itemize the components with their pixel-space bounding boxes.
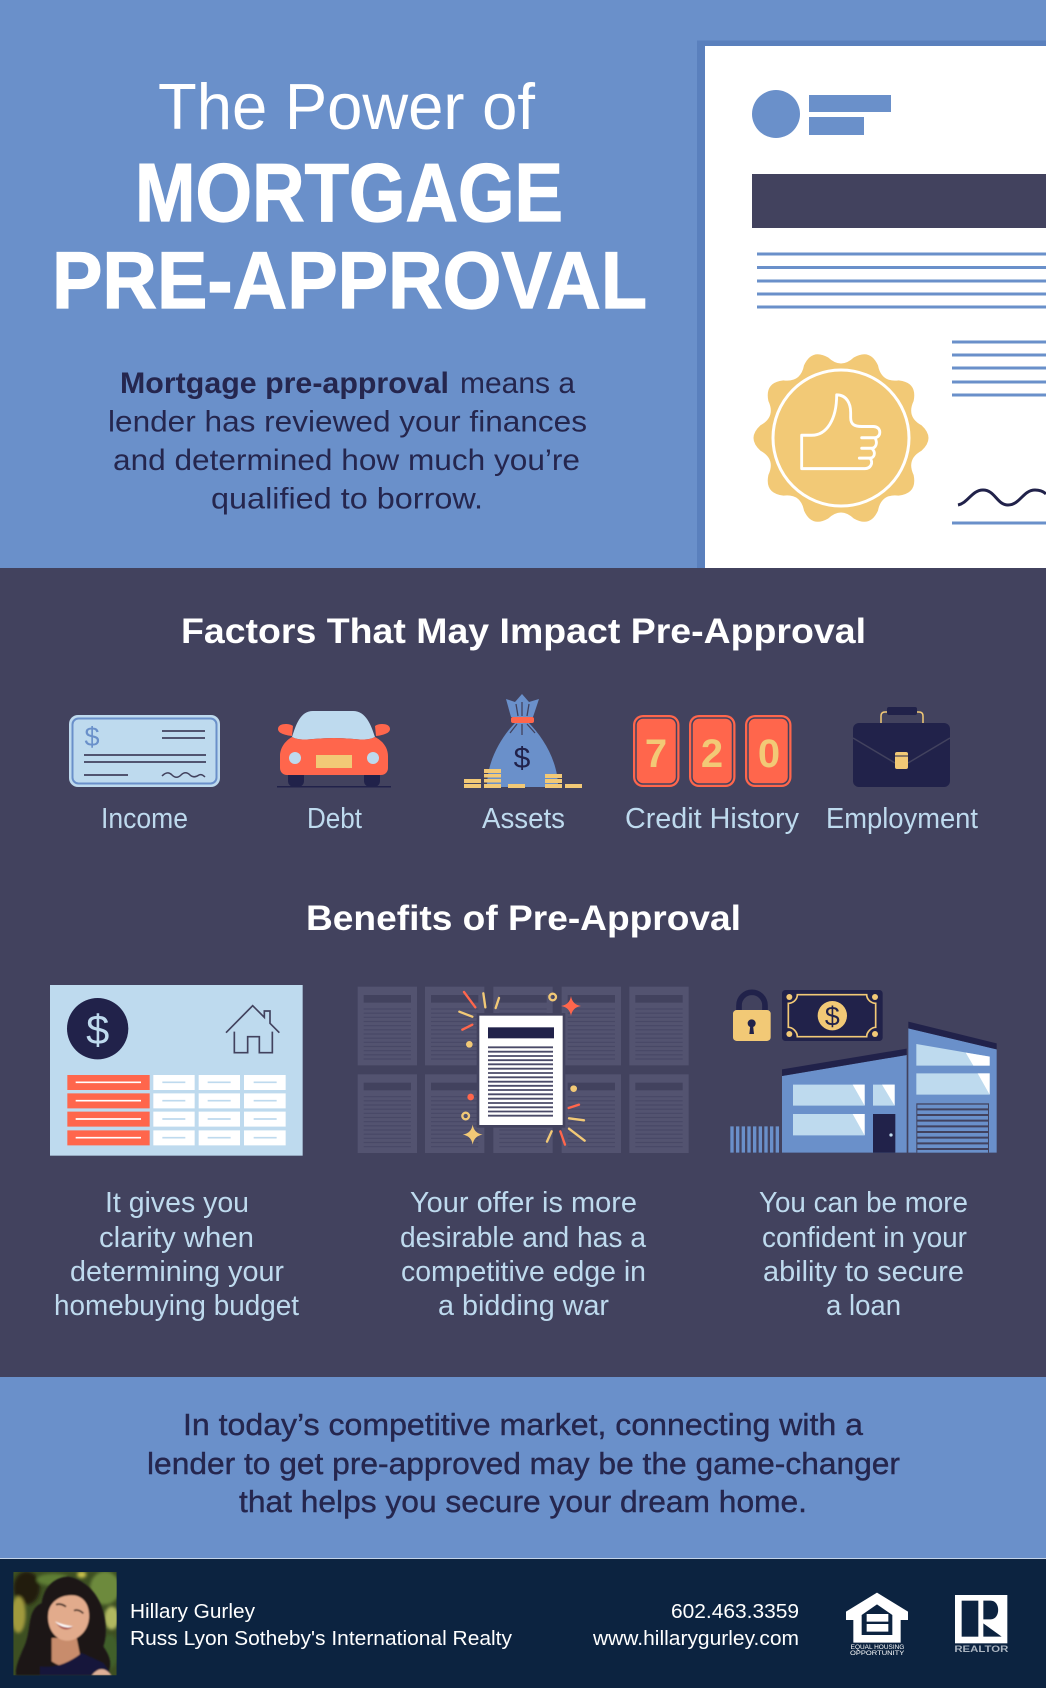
factor: credit history [625, 715, 800, 835]
icon: equal housing opportunity: EQUAL HOUSING [851, 1644, 904, 1651]
factor: employment [826, 707, 978, 835]
agent contact details: 602.463.3359 [671, 1601, 799, 1623]
icon: equal housing opportunity [846, 1593, 908, 1657]
text: budget clarity: clarity when [99, 1222, 254, 1254]
icon: credit score 720: 0 [758, 732, 780, 776]
agent name and brokerage [130, 1601, 512, 1650]
factor: income [69, 715, 220, 835]
icon: credit score 720: 7 [645, 732, 667, 776]
text: budget clarity: It gives you [105, 1187, 249, 1219]
text: budget clarity [54, 1187, 299, 1322]
factor: debt [277, 711, 391, 835]
heading: factors: Factors That May Impact Pre-Approval [181, 612, 866, 651]
panel: closing statement [0, 1377, 1046, 1558]
icon: car [277, 711, 391, 788]
panel: closing statement: that helps you secure your dream home. [239, 1484, 807, 1519]
icon: approval seal with thumbs up [754, 354, 928, 522]
benefit: budget clarity [50, 985, 303, 1322]
text: competitive offer: desirable and has a [400, 1222, 647, 1254]
illustration: budget sheet [50, 985, 303, 1156]
benefit: loan confidence [730, 990, 997, 1322]
label: assets: Assets [482, 803, 565, 835]
text: competitive offer [400, 1187, 647, 1322]
intro paragraph: and determined how much you’re [113, 444, 580, 477]
icon: banknote: $ [825, 1001, 840, 1031]
icon: equal housing opportunity: OPPORTUNITY [850, 1650, 905, 1657]
panel: footer [0, 1558, 1046, 1688]
agent name and brokerage: Hillary Gurley [130, 1601, 255, 1623]
label: credit history: Credit History [625, 803, 800, 835]
agent contact details [592, 1601, 799, 1650]
text: loan confidence [759, 1187, 968, 1322]
title line: The Power of: The Power of [158, 70, 536, 143]
text: loan confidence: ability to secure [763, 1256, 964, 1288]
text: competitive offer: competitive edge in [401, 1256, 646, 1288]
heading: benefits: Benefits of Pre-Approval [306, 899, 741, 938]
icon: money bag [464, 694, 582, 788]
title [52, 70, 647, 326]
title line: Pre-Approval: PRE-APPROVAL [52, 236, 647, 326]
photo: agent portrait [11, 1571, 120, 1675]
intro paragraph: means a [460, 367, 576, 400]
agent name and brokerage: Russ Lyon Sotheby's International Realty [130, 1628, 512, 1650]
text: loan confidence: You can be more [759, 1187, 968, 1219]
illustration: house, lock and cash [730, 990, 997, 1153]
text: loan confidence: a loan [826, 1290, 901, 1322]
icon: realtor logo [954, 1595, 1009, 1654]
agent contact details: www.hillarygurley.com [592, 1628, 799, 1650]
illustration: approved document [697, 40, 1046, 568]
label: employment: Employment [826, 803, 978, 835]
icon: modern house [730, 1022, 997, 1153]
intro paragraph: lender has reviewed your finances [108, 406, 587, 438]
panel: closing statement: In today’s competitive market, connecting with a [183, 1407, 864, 1442]
title line: Mortgage: MORTGAGE [135, 146, 563, 239]
panel: header background [0, 0, 1046, 568]
icon: check [69, 715, 220, 787]
benefit: competitive offer [358, 987, 689, 1322]
icon: credit score 720 [633, 715, 792, 787]
icon: briefcase [853, 707, 950, 787]
factor: assets [464, 694, 582, 835]
text: competitive offer: Your offer is more [410, 1187, 637, 1219]
signature [958, 490, 1046, 505]
text: budget clarity: homebuying budget [54, 1290, 299, 1322]
text: budget clarity: determining your [70, 1256, 284, 1288]
icon: credit score 720: 2 [701, 732, 723, 776]
label: debt: Debt [307, 803, 362, 835]
illustration: standout document [358, 987, 689, 1153]
illustration: budget sheet: $ [86, 1006, 109, 1053]
icon: realtor logo: REALTOR [954, 1644, 1009, 1654]
intro paragraph: Mortgage pre-approval [120, 367, 449, 400]
intro paragraph: qualified to borrow. [211, 482, 483, 516]
intro paragraph [108, 367, 587, 516]
panel: closing statement: lender to get pre-approved may be the game-changer [147, 1446, 900, 1481]
panel: factors and benefits background [0, 568, 1046, 1377]
label: income: Income [101, 803, 188, 835]
icon: padlock [733, 992, 771, 1041]
icon: check: $ [84, 722, 100, 752]
text: loan confidence: confident in your [762, 1222, 967, 1254]
icon: money bag: $ [514, 742, 531, 775]
icon: banknote [782, 990, 883, 1041]
text: competitive offer: a bidding war [438, 1290, 609, 1322]
